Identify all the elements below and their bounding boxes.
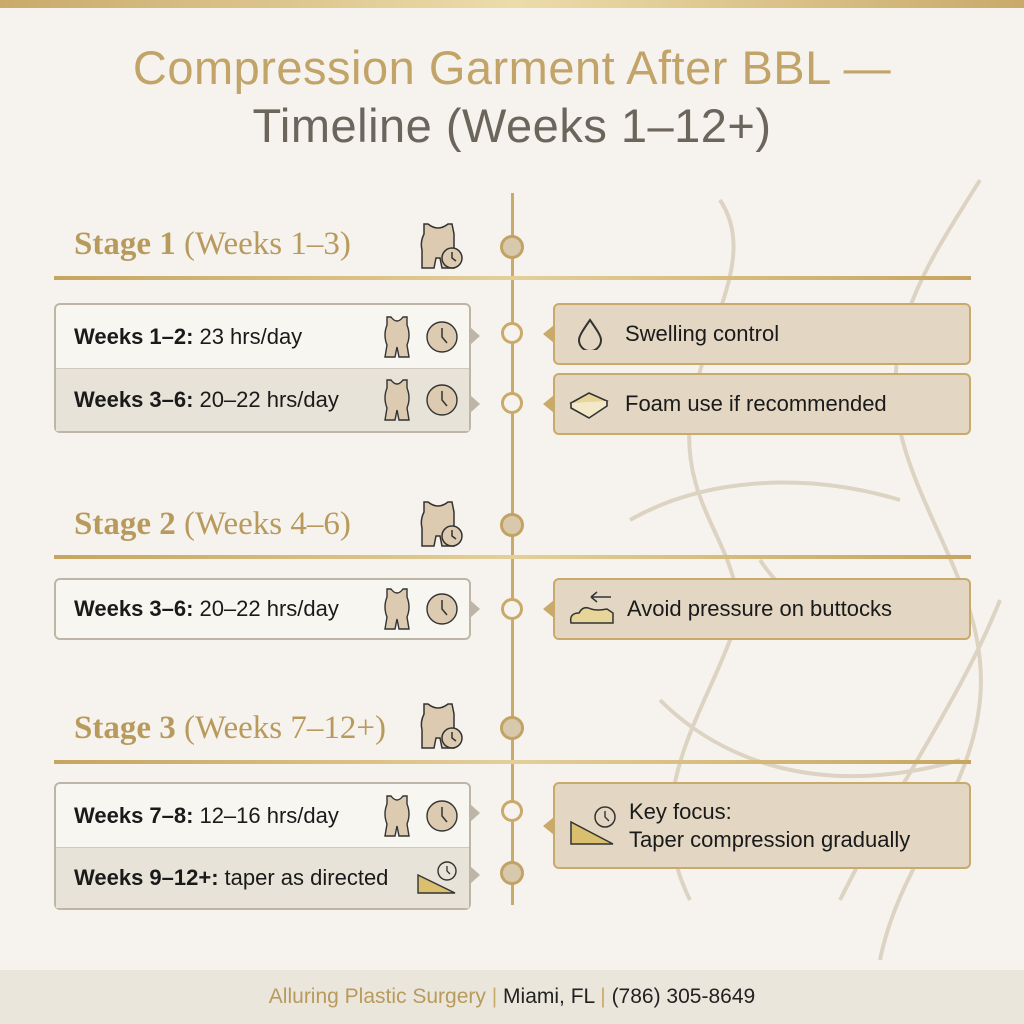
icon: garment clock stage 1 [420, 223, 463, 269]
card: stage 3 left: Weeks 7–8: [74, 802, 193, 828]
icon: garment clock stage 3 [420, 703, 463, 749]
card: stage 2 left: Weeks 3–6: [74, 596, 193, 621]
card: stage 3 left: taper as directed [225, 865, 388, 890]
title: Timeline (Weeks 1–12+) [252, 99, 772, 152]
title: Compression Garment After BBL — [133, 41, 891, 94]
card: stage 1 left: Weeks 3–6: [74, 387, 193, 412]
card: foam [553, 373, 971, 435]
card: avoid pressure [553, 578, 971, 640]
card: key focus [553, 782, 971, 869]
card: stage 1 left: 23 hrs/day [199, 324, 302, 348]
stage 2 header: Stage 2 (Weeks 4–6) [74, 506, 351, 542]
footer: Alluring Plastic Surgery | Miami, FL | (786) 305-8649 [269, 985, 755, 1008]
top gold bar [0, 0, 1024, 8]
stage 3 header: Stage 3 (Weeks 7–12+) [74, 710, 386, 746]
timeline line [511, 193, 514, 905]
card: stage 1 left [54, 303, 471, 433]
footer [0, 970, 1024, 1024]
card: stage 3 left: Weeks 9–12+: [74, 865, 219, 890]
card: avoid pressure: Avoid pressure on buttocks [627, 596, 892, 621]
card: foam: Foam use if recommended [625, 391, 887, 416]
card: key focus: Key focus: [629, 798, 732, 824]
card: stage 2 left: 20–22 hrs/day [199, 596, 339, 621]
card: stage 2 left [54, 578, 471, 640]
card: stage 3 left [54, 782, 471, 910]
card: stage 1 left: Weeks 1–2: [74, 324, 193, 348]
card: stage 1 left: 20–22 hrs/day [199, 387, 339, 412]
card: stage 3 left: 12–16 hrs/day [199, 802, 339, 828]
icon: garment clock stage 2 [420, 501, 463, 547]
card: swelling control [553, 303, 971, 365]
stage 1 header: Stage 1 (Weeks 1–3) [74, 226, 351, 262]
card: key focus: Taper compression gradually [629, 826, 910, 852]
card: swelling control: Swelling control [625, 321, 779, 346]
title [133, 41, 891, 152]
